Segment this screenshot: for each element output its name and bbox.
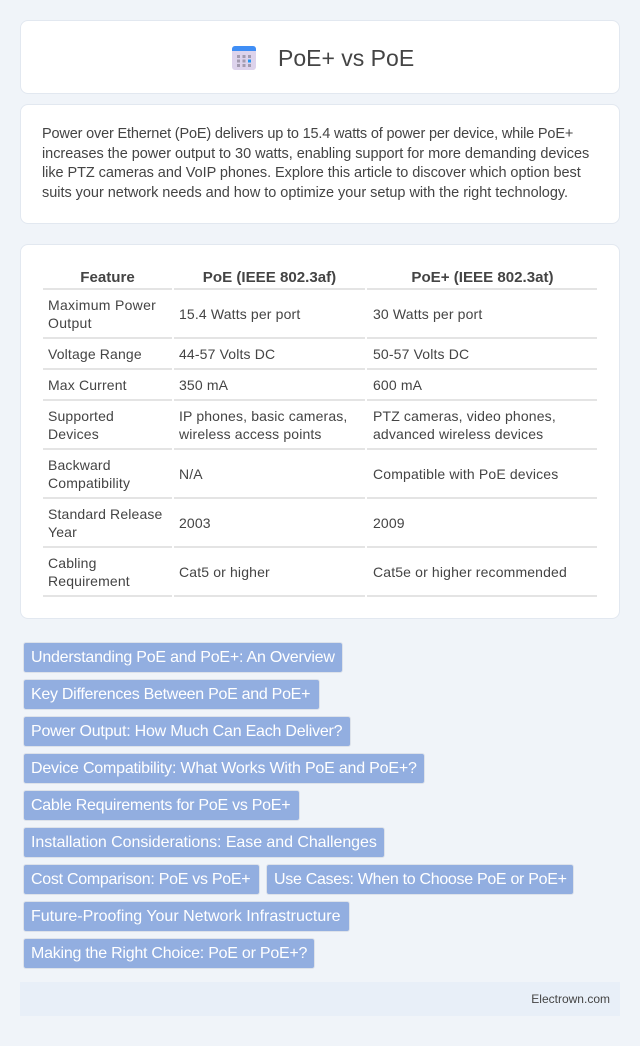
panel: comparison table [20,244,620,619]
link button: cable requirements [23,790,300,821]
footer [20,982,620,1016]
panel: introduction [20,104,620,224]
row: max current [48,377,422,393]
table header: PoE (IEEE 802.3af) [203,269,336,286]
link button: device compatibility [23,753,425,784]
link button: cable requirements: Cable Requirements for PoE vs PoE+ [31,797,290,814]
row: backward compatibility [48,457,558,491]
row: supported devices: wireless access points [179,426,322,442]
link button: power output: Power Output: How Much Can Each Deliver? [31,723,342,740]
row: backward compatibility: N/A [179,466,203,482]
row: maximum power output: Maximum Power [48,297,156,313]
row: maximum power output: 30 Watts per port [373,306,482,322]
row: standard release year: 2003 [179,515,211,531]
link button: installation [23,827,385,858]
row: cabling requirement: Requirement [48,573,130,589]
text block: intro: like PTZ cameras and VoIP phones. Explore this article to discover which option best [42,165,581,181]
row: voltage range [48,346,469,362]
text block: intro: increases the power output to 30 watts, enabling support for more demanding devices [42,146,589,162]
panel: title [20,20,620,94]
link button: power output [23,716,351,747]
row: cabling requirement [48,555,567,589]
row: backward compatibility: Compatible with PoE devices [373,466,558,482]
link button: use cases [266,864,574,895]
row: supported devices: PTZ cameras, video phones, [373,408,556,424]
table header: Feature [80,269,135,286]
row: max current: 350 mA [179,377,228,393]
row: backward compatibility: Compatibility [48,475,130,491]
link button: right choice [23,938,315,969]
row: supported devices: IP phones, basic cameras, [179,408,347,424]
row: maximum power output: Output [48,315,92,331]
row: standard release year: Year [48,524,77,540]
link button: cost comparison: Cost Comparison: PoE vs PoE+ [31,871,250,888]
link button: right choice: Making the Right Choice: PoE or PoE+? [31,945,307,962]
icon: calendar grid [232,46,256,70]
link button: cost comparison [23,864,260,895]
row: cabling requirement: Cat5 or higher [179,564,270,580]
row: maximum power output: 15.4 Watts per port [179,306,300,322]
row: backward compatibility: Backward [48,457,111,473]
link button: overview [23,642,343,673]
row: cabling requirement: Cat5e or higher recommended [373,564,567,580]
row: cabling requirement: Cabling [48,555,97,571]
link button: key differences [23,679,320,710]
link button: future-proofing: Future-Proofing Your Network Infrastructure [31,908,340,925]
link button: key differences: Key Differences Between PoE and PoE+ [31,686,310,703]
text block: intro [42,126,589,200]
row: supported devices: Supported [48,408,114,424]
table header [80,269,554,286]
link button: overview: Understanding PoE and PoE+: An Overview [31,649,335,666]
row: standard release year [48,506,405,540]
row: supported devices: advanced wireless devices [373,426,543,442]
link button: installation: Installation Considerations: Ease and Challenges [31,834,377,851]
row: standard release year: 2009 [373,515,405,531]
row: voltage range: Voltage Range [48,346,142,362]
row: maximum power output [48,297,482,331]
row: supported devices [48,408,556,442]
row: voltage range: 44-57 Volts DC [179,346,275,362]
footer credit: Electrown.com [531,992,610,1006]
table header: PoE+ (IEEE 802.3at) [411,269,554,286]
row: voltage range: 50-57 Volts DC [373,346,469,362]
link button: device compatibility: Device Compatibility: What Works With PoE and PoE+? [31,760,417,777]
link button: future-proofing [23,901,350,932]
row: max current: Max Current [48,377,127,393]
link button: use cases: Use Cases: When to Choose PoE or PoE+ [274,871,567,888]
row: supported devices: Devices [48,426,99,442]
row: max current: 600 mA [373,377,422,393]
text block: intro: Power over Ethernet (PoE) delivers up to 15.4 watts of power per device, while PoE+ [42,126,573,142]
text block: intro: suits your network needs and how to optimize your setup with the right technology. [42,184,568,200]
row: standard release year: Standard Release [48,506,162,522]
heading: PoE+ vs PoE [278,45,414,71]
